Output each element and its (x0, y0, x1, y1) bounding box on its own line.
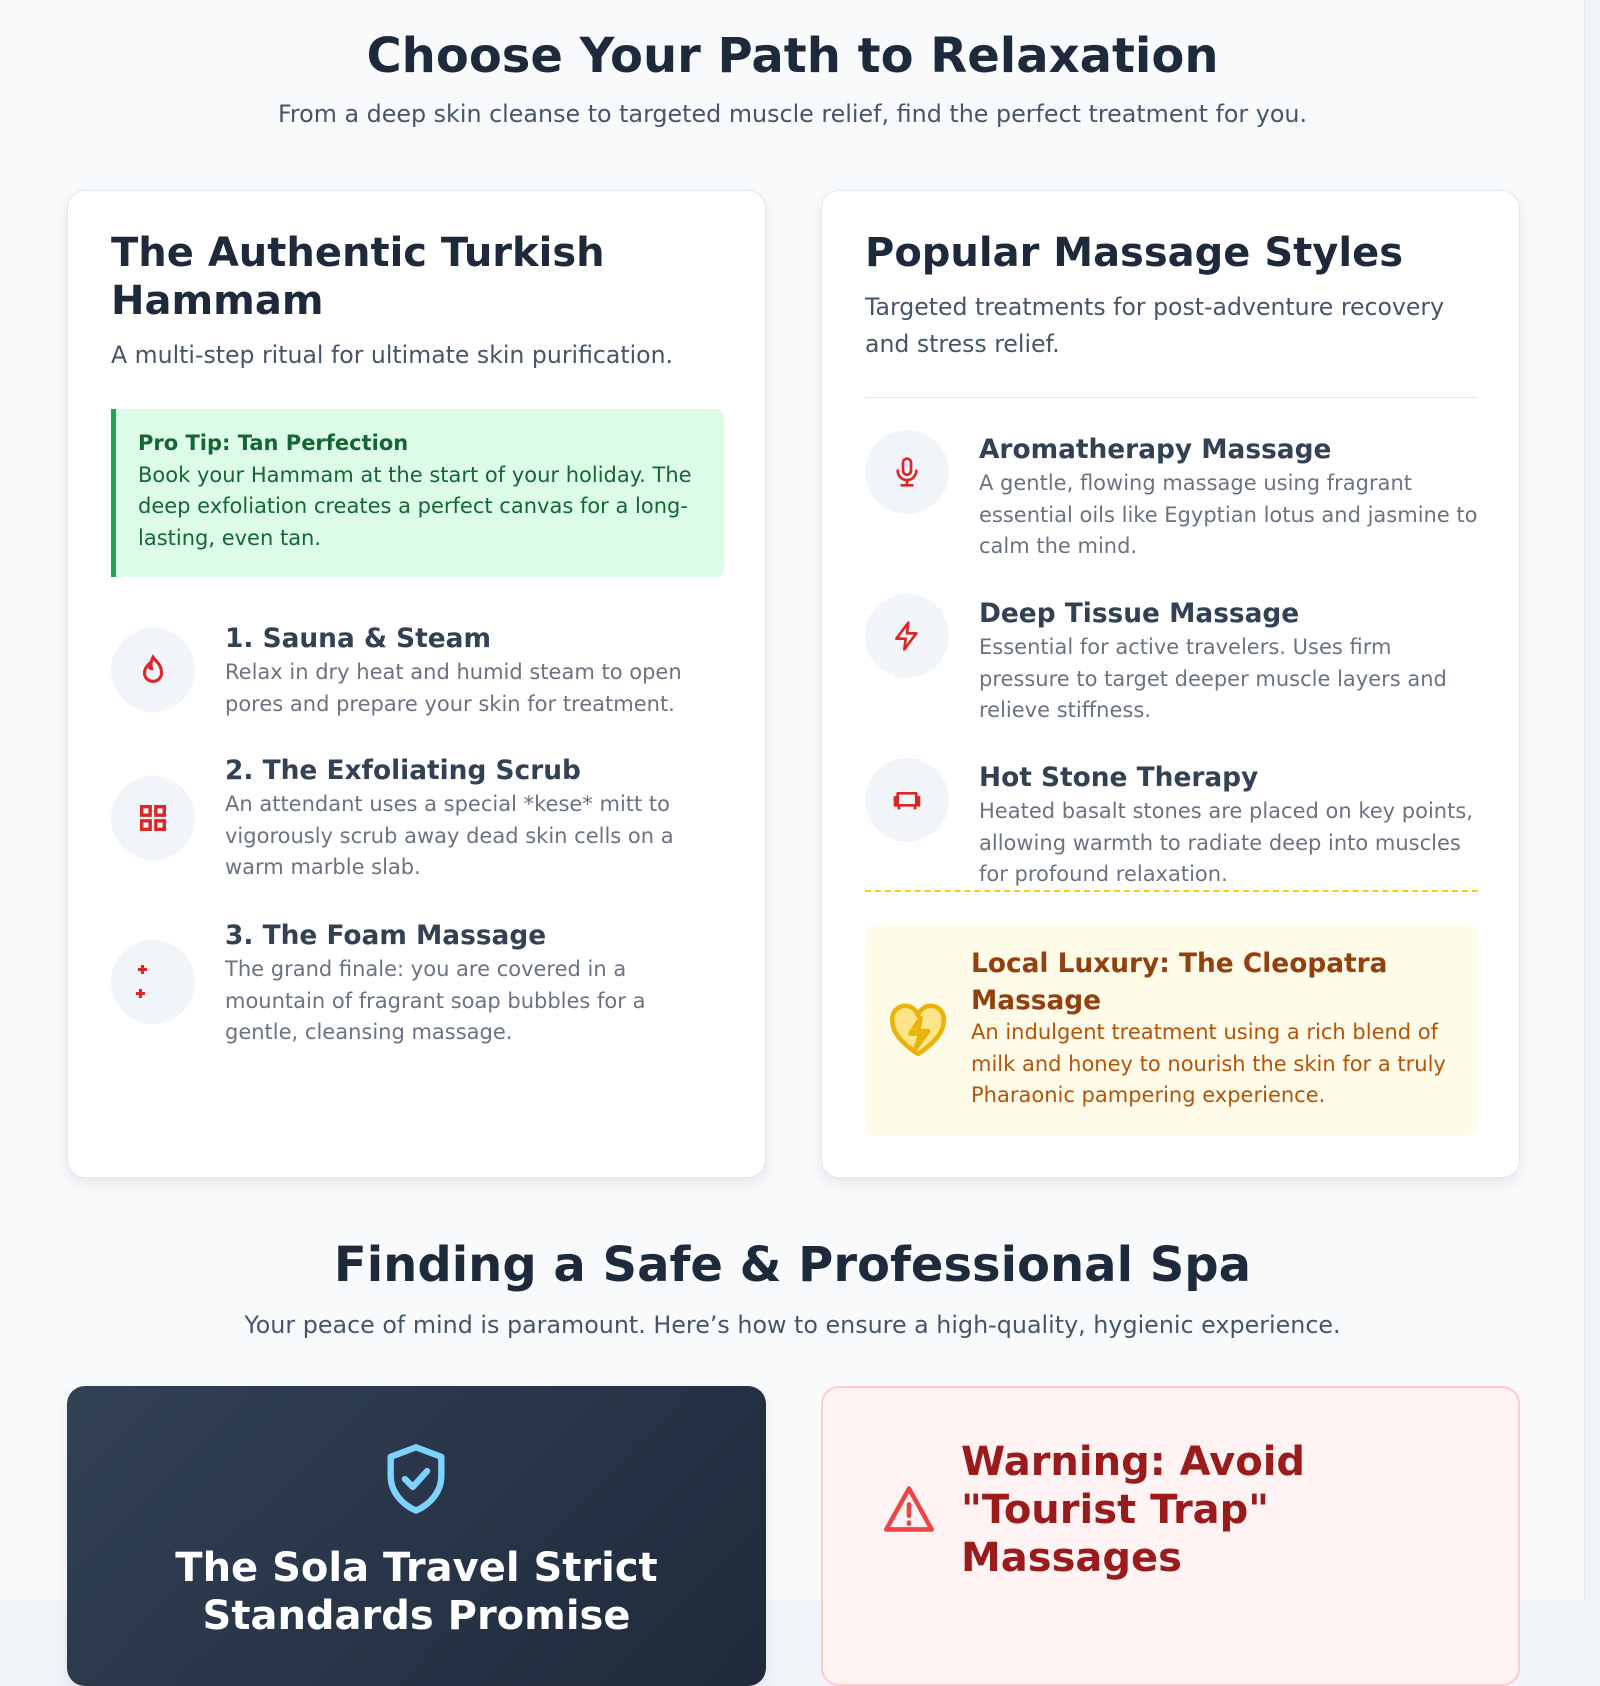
item: hot stone: Hot Stone Therapy (979, 762, 1258, 793)
icon: warning triangle (884, 1486, 934, 1532)
callout: cleopatra: Local Luxury: The Cleopatra Massage (971, 948, 1387, 1016)
callout: pro tip: Book your Hammam at the start of your holiday. The deep exfoliation creates a perfect canvas for a long-lasting, even tan. (138, 463, 692, 550)
step 3 (111, 920, 645, 1044)
step 1 (111, 623, 682, 716)
heading: hammam: The Authentic Turkish (111, 230, 605, 276)
text: massage subtitle: Targeted treatments for post-adventure recovery and stress relief. (865, 293, 1444, 358)
step 1: 1. Sauna & Steam (225, 623, 491, 654)
icon: sparkles (111, 940, 195, 1024)
heading: sola: The Sola Travel Strict (175, 1545, 658, 1591)
icon: heart bolt (890, 1004, 946, 1056)
heading: safe spa: Finding a Safe & Professional Spa (334, 1237, 1251, 1293)
title: Choose Your Path to Relaxation (366, 28, 1219, 84)
callout: cleopatra: An indulgent treatment using a rich blend of milk and honey to nourish the skin for a truly Pharaonic pampering experience. (971, 1020, 1446, 1107)
heading: hammam: Hammam (111, 278, 324, 324)
step 1: Relax in dry heat and humid steam to open pores and prepare your skin for treatment. (225, 660, 682, 716)
item: aromatherapy: Aromatherapy Massage (979, 434, 1331, 465)
item: deep tissue: Essential for active travelers. Uses firm pressure to target deeper muscle layers and relieve stiffness. (979, 635, 1447, 722)
icon: couch (865, 758, 949, 842)
text: safe spa subtitle: Your peace of mind is paramount. Here’s how to ensure a high-quality, hygienic experience. (244, 1311, 1341, 1339)
heading: warning: "Tourist Trap" (961, 1487, 1269, 1533)
heading: sola: Standards Promise (203, 1593, 630, 1639)
heading: massage styles: Popular Massage Styles (865, 230, 1403, 276)
heading: warning: Massages (961, 1535, 1182, 1581)
subtitle: From a deep skin cleanse to targeted muscle relief, find the perfect treatment for you. (278, 100, 1307, 128)
item: deep tissue: Deep Tissue Massage (979, 598, 1299, 629)
heading: hammam (111, 230, 605, 324)
callout: pro tip: Pro Tip: Tan Perfection (138, 431, 408, 455)
step 2: An attendant uses a special *kese* mitt to vigorously scrub away dead skin cells on a warm marble slab. (225, 792, 674, 879)
item: aromatherapy (865, 430, 1478, 558)
item: hot stone (865, 758, 1473, 886)
panel: turkish hammam (67, 190, 766, 1178)
item: aromatherapy: A gentle, flowing massage using fragrant essential oils like Egyptian lotus and jasmine to calm the mind. (979, 471, 1478, 558)
icon: grid (111, 776, 195, 860)
callout: cleopatra (865, 925, 1478, 1136)
panel: sola standards (67, 1386, 766, 1686)
item: hot stone: Heated basalt stones are placed on key points, allowing warmth to radiate deep into muscles for profound relaxation. (979, 799, 1473, 886)
icon: microphone (865, 430, 949, 514)
panel: turkish hammam: 2. The Exfoliating Scrub (225, 755, 581, 786)
step 3: The grand finale: you are covered in a mountain of fragrant soap bubbles for a gentle, cleansing massage. (225, 957, 645, 1044)
heading: sola (175, 1545, 658, 1639)
item: deep tissue (865, 594, 1447, 722)
callout: pro tip (111, 409, 724, 577)
icon: shield (388, 1444, 444, 1514)
icon: lightning (865, 594, 949, 678)
text: hammam subtitle: A multi-step ritual for ultimate skin purification. (111, 341, 673, 369)
heading: warning (961, 1439, 1305, 1581)
heading: warning: Warning: Avoid (961, 1439, 1305, 1485)
step 2 (111, 755, 674, 879)
icon: flame (111, 628, 195, 712)
panel: turkish hammam: 3. The Foam Massage (225, 920, 546, 951)
panel: massage styles (821, 190, 1520, 1178)
panel: warning (821, 1386, 1520, 1686)
